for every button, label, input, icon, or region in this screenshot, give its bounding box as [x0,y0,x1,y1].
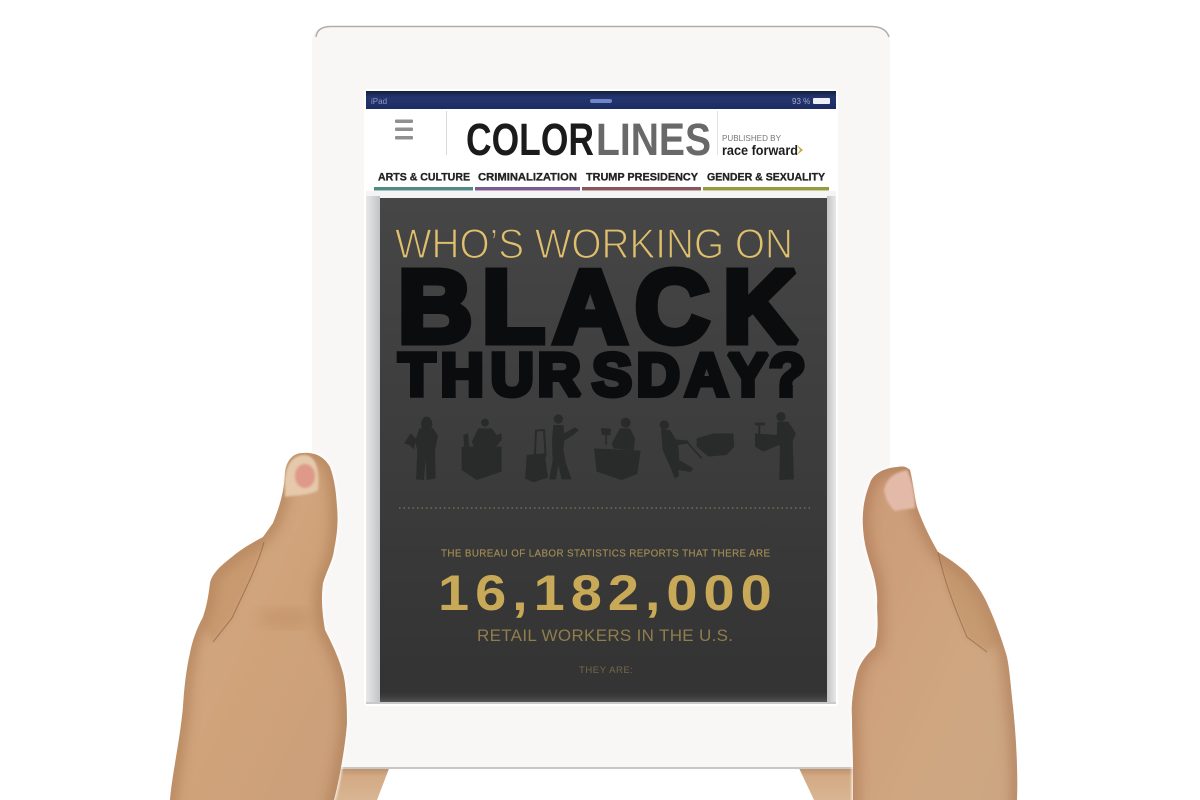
nav: arts and culture: ARTS & CULTURE [378,172,470,184]
title: thursday: THURSDAY? [398,342,806,408]
text: bureau of labor statistics: THE BUREAU OF LABOR STATISTICS REPORTS THAT THERE ARE [441,548,770,560]
hand: left [168,453,347,800]
nav: trump presidency [582,172,701,190]
icon: hamburger menu [395,120,413,140]
navigation bar [374,172,829,190]
stat: retail worker count: 16,182,000 [438,566,772,621]
text: they are: THEY ARE: [579,665,633,676]
thumb nail [285,455,318,497]
nav: criminalization: CRIMINALIZATION [478,172,577,184]
divider: dotted line [399,507,811,509]
thumb nail [884,470,915,511]
status bar [366,91,836,109]
screen side bars [366,196,836,704]
knuckle shade [266,611,304,625]
icon: worker at counter [462,419,502,480]
icon: cashier at register [594,418,641,480]
icon: worker with toy [404,417,438,480]
nav: criminalization [475,172,580,190]
wrist: right [798,766,860,800]
hand: right [852,466,1017,800]
status bar: home indicator [590,99,612,103]
panel: infographic [380,198,827,702]
icon: worker pulling pallet [660,420,734,479]
title: who's working on: WHO’S WORKING ON [395,220,793,267]
index finger shade [207,548,258,638]
text: retail workers in the U.S.: RETAIL WORKERS IN THE U.S. [477,626,733,645]
logo: Colorlines: COLOR [466,114,594,165]
index finger shade [944,564,995,650]
nav: trump presidency: TRUMP PRESIDENCY [586,172,699,184]
title: black: BLACK [398,249,797,364]
text: published by: PUBLISHED BY [722,133,781,143]
logo: race forward: race forward [722,142,798,158]
tablet body [312,26,890,768]
nav: arts and culture [374,172,473,190]
index crease [938,552,987,652]
header: Colorlines masthead [366,109,836,191]
hand shading [852,466,1017,800]
screen: iPad display [366,91,836,704]
status bar: device label: iPad [371,97,387,106]
nail pink [295,464,315,488]
logo: Colorlines second part: LINES [596,114,711,165]
nav: gender and sexuality: GENDER & SEXUALITY [707,172,826,184]
icon: race forward arrow [797,145,803,155]
nav: gender and sexuality [703,172,829,190]
icon: worker carrying box [755,412,796,480]
wrist: left [320,766,390,800]
icon: worker with hand truck [525,414,579,482]
status bar: battery percent: 93 % [792,97,810,106]
silhouettes: retail workers [404,412,796,482]
index crease [213,542,264,642]
status bar: battery icon [813,98,830,104]
hand shading [168,453,347,800]
